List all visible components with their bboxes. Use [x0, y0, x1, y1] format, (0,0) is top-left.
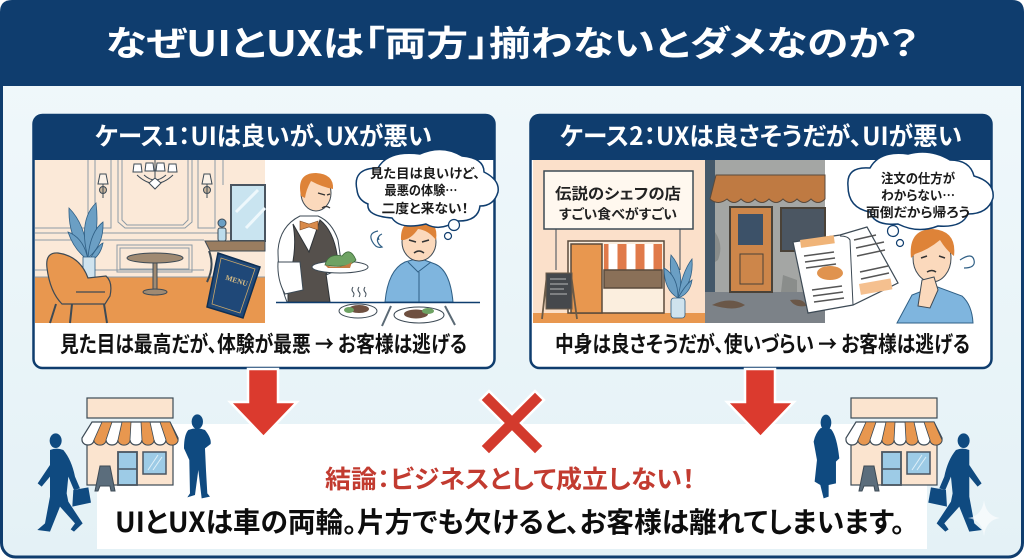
illustration: confusing menu [793, 227, 898, 313]
potted plant [664, 255, 692, 318]
thought bubble: 二度と来ない！ [382, 198, 468, 217]
illustration: rude waiter [278, 173, 368, 302]
conclusion heading: 結論：ビジネスとして成立しない！ [325, 460, 695, 496]
title: なぜUIとUXは「両方」揃わないとダメなのか？ [106, 16, 918, 67]
illustration: unhappy customer [371, 219, 453, 302]
shop door and window [568, 241, 664, 313]
panel: case 2 [530, 114, 993, 368]
icon: walking man right [928, 433, 982, 532]
illustration: puzzled customer [897, 229, 974, 323]
sign [544, 171, 693, 229]
case 2 heading: ケース2：UXは良さそうだが、UIが悪い [560, 117, 962, 153]
menu book: MENU [224, 273, 250, 288]
console table and vase [205, 219, 265, 282]
conclusion text: UIとUXは車の両輪。片方でも欠けると、お客様は離れてしまいます。 [115, 501, 905, 541]
illustration: run-down storefront [705, 160, 825, 323]
chalkboard [542, 273, 577, 319]
icon: shop left [82, 398, 178, 491]
arrow: left down [230, 369, 297, 437]
case 1 caption: 見た目は最高だが、体験が最悪 → お客様は逃げる [60, 327, 467, 359]
thought bubble: 面倒だから帰ろう [866, 202, 970, 221]
icon: walking man left [37, 433, 91, 532]
thought bubble: 最悪の体験… [384, 180, 458, 199]
wall sconces [98, 174, 212, 198]
panel: case 1 [33, 114, 498, 368]
conclusion panel [97, 424, 927, 549]
case 2 heading [530, 114, 992, 160]
icon: standing woman right [814, 415, 839, 498]
title band [0, 0, 1024, 86]
case 1 heading [33, 114, 495, 160]
armchair [47, 253, 111, 323]
sign: 伝説のシェフの店 [555, 182, 681, 204]
menu book [207, 253, 260, 318]
case 1 heading: ケース1：UIは良いが、UXが悪い [95, 117, 432, 153]
illustration: elegant restaurant interior [35, 160, 265, 323]
arrow: right down [727, 369, 794, 437]
thought bubble: 見た目は良いけど、 [370, 163, 480, 182]
table and plates [276, 287, 480, 326]
plant [68, 203, 103, 279]
icon: red cross [480, 391, 544, 455]
icon: shop right [846, 398, 942, 491]
icon: sparkle [968, 500, 1000, 536]
thought bubble [848, 152, 993, 246]
illustration: attractive storefront [533, 160, 705, 323]
sign: すごい食べがすごい [559, 203, 677, 223]
mirror [231, 185, 265, 241]
chandelier [133, 160, 177, 189]
icon: standing person left [184, 414, 211, 498]
round table [127, 253, 183, 295]
thought bubble [356, 149, 498, 240]
thought bubble: 注文の仕方が [881, 168, 955, 187]
thought bubble: わからない… [881, 185, 955, 204]
